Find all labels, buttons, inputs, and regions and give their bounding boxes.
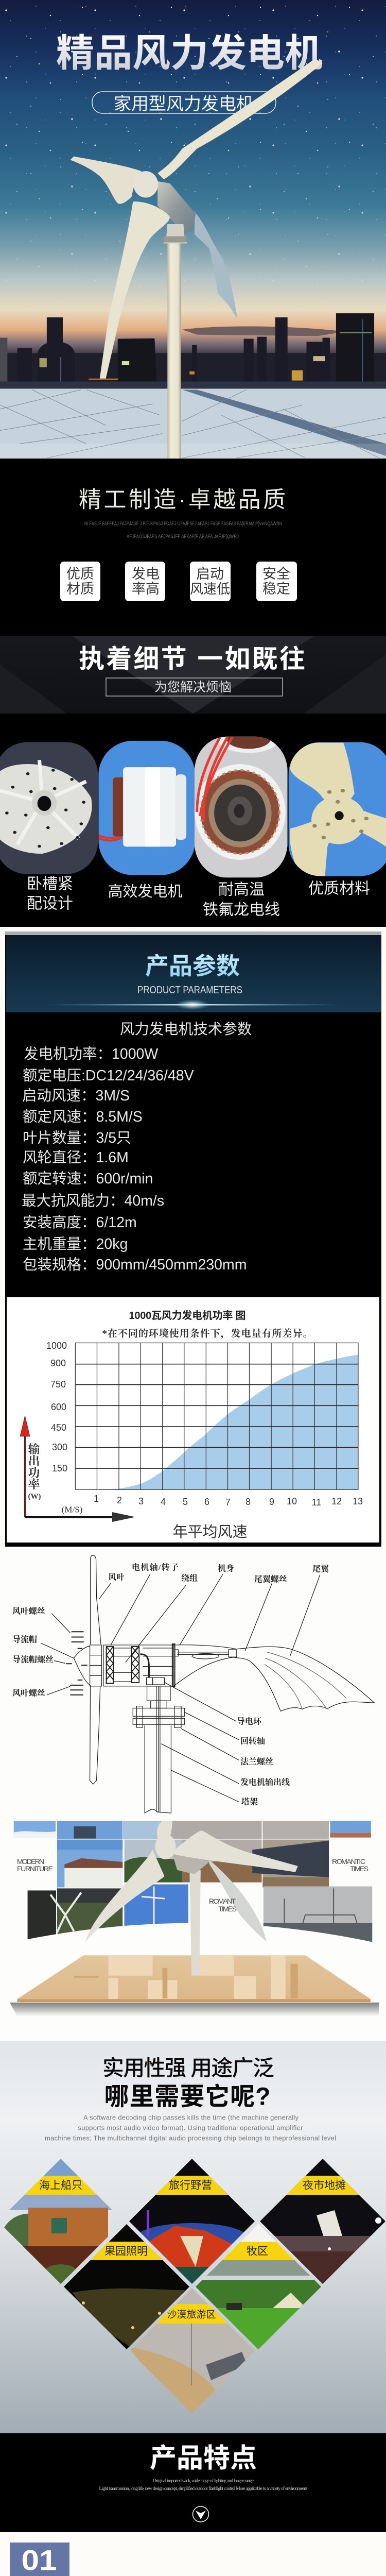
latin filler text [84,521,282,540]
power curve chart: 9 [269,1497,274,1507]
spec table: 包装规格：900mm/450mm230mm [23,1257,247,1273]
panel: usage scenarios [0,2041,386,2433]
latin filler text: AFJPAOSJFAPS AFJPASJFP AFKAP[F AF AFA JAFJP[QWRJ [127,534,239,540]
heading: 哪里需要它呢? [104,2083,271,2110]
banner: product features [0,2433,386,2532]
power curve chart: 6 [204,1497,209,1507]
spec table: 风轮直径：1.6M [23,1149,129,1166]
feature tag: generation rate: 率高 [132,581,160,597]
feature tag: low start wind: 启动 [196,566,224,582]
latin filler text: NI FASJF FAPFPAJ FAJPJASF J P[FJKPASJ FOAFJ OFAJPSFJ AFAPJ FASP FASFAS FA[KRAM P[VHNQAWRN [84,521,282,527]
subtitle pill [92,92,276,114]
banner: attention to detail [0,636,386,714]
spec table: 主机重量：20kg [23,1236,128,1252]
photo: generator housing [98,741,195,875]
blades and nose cap [74,1555,102,1784]
power curve chart: 输 [28,1443,40,1456]
collage captions: TIMES [350,1865,369,1873]
power curve chart: 600 [51,1402,66,1412]
diamond: night market [260,2159,385,2284]
power curve chart: 300 [52,1442,67,1452]
diamond: sea vessels: 海上船只 [39,2179,82,2192]
part labels: 发电机输出线 [240,1777,290,1787]
leader lines [41,1574,320,1802]
parameters header: PRODUCT PARAMETERS [137,985,242,996]
part labels: 风叶 [108,1572,125,1582]
feature tag: safe and stable: 安全 [262,566,290,582]
photo: nylon blade hub [289,742,386,876]
caption: teflon wire: 耐高温 [218,881,265,899]
power curve chart: 150 [52,1463,67,1473]
spec table: 叶片数量：3/5只 [23,1130,131,1146]
power curve chart: 12 [331,1496,342,1506]
panel: component details [0,714,386,927]
panel: craftsmanship quality [0,459,386,636]
heading: 执着细节 一如既往 [79,645,305,673]
power curve chart: 功 [28,1466,40,1480]
part labels: 回转轴 [240,1736,265,1745]
part labels: 绕组 [181,1573,198,1583]
part labels: 风叶螺丝 [12,1688,45,1698]
subheading box [106,678,283,696]
power curve chart: 450 [51,1422,66,1433]
power curve chart [7,1297,379,1543]
diamond: camping: 旅行野营 [169,2179,212,2192]
power curve chart: 1 [94,1494,99,1504]
badge 01: 01 [22,2544,57,2576]
power curve chart: (W) [28,1493,41,1501]
power curve chart: 750 [50,1379,66,1389]
caption: teflon wire: 铁氟龙电线 [203,902,280,918]
heading: 产品特点 [150,2444,257,2473]
power curve chart: *在不同的环境使用条件下，发电量有所差异。 [102,1327,313,1340]
power curve chart: 1000 [46,1341,67,1351]
turbine [85,1821,298,1976]
sub text: Light transmission, long life, new design concept, simplified outdoor flashlight control More applicable to a variety of environments [99,2486,308,2492]
part labels: 导电环 [237,1717,262,1726]
heading: 实用性强 用途广泛 [102,2056,274,2080]
spec table: 安装高度：6/12m [23,1214,137,1231]
caption: slotted fit: 配设计 [27,895,73,912]
part labels [12,1562,330,1806]
english text block: supports most audio video format). Using traditional operational amplifier [78,2124,303,2132]
power curve chart: 10 [287,1496,297,1506]
feature tag: quality material [60,562,100,601]
spec table: 额定电压:DC12/24/36/48V [23,1067,194,1084]
feature tag: generation rate [125,562,165,601]
wind turbine [70,59,323,459]
part labels: 法兰螺丝 [240,1757,273,1766]
collage captions: MODERN [17,1857,44,1866]
english text block: machine times; The multichannel digital audio processing chip belongs to theprofessional level [45,2134,336,2142]
feature tag: low start wind [190,562,231,601]
parameters header [6,935,381,1012]
screws [66,1632,87,1695]
collage captions: FURNITURE [17,1865,53,1873]
diamond: pasture: 牧区 [247,2245,268,2258]
sub text: Original imported wick, wide range of lighting and longer range [153,2478,254,2484]
power curve chart: 8 [245,1497,251,1507]
feature tag: quality material: 优质 [66,566,94,582]
power curve chart: 13 [353,1496,363,1506]
caption: slotted fit [27,876,73,912]
diamond: camping [129,2159,255,2284]
diamond: orchard lighting: 果园照明 [104,2245,148,2258]
collage captions: ROMANTIC [332,1857,365,1866]
sub text [99,2478,308,2492]
feature tag: generation rate: 发电 [132,566,160,582]
heading [102,2056,274,2110]
spec table: 发电机功率：1000W [24,1046,158,1062]
spec table: 最大抗风能力：40m/s [22,1193,164,1209]
heading: 精工制造·卓越品质 [79,487,286,512]
power curve chart: (M/S) [62,1504,82,1515]
diamond: pasture [196,2224,321,2349]
title: 精品风力发电机 [56,32,323,74]
photo: slotted flange disc [0,742,98,874]
power curve chart: 3 [138,1496,144,1506]
part labels: 尾翼螺丝 [254,1574,287,1584]
parameters header: 产品参数 [145,953,240,979]
skyline and terrace floor [0,313,386,459]
part labels: 塔架 [241,1797,258,1806]
panel: product parameters [5,931,381,1547]
part labels: 尾翼 [312,1564,330,1573]
subheading box: 为您解决烦恼 [154,680,232,694]
feature tag: low start wind: 风速低 [190,581,230,597]
diamond: orchard lighting [64,2224,189,2349]
power curve chart: 7 [225,1497,231,1507]
diagram: turbine exploded structure [12,1555,375,1814]
collage captions: ROMANT [209,1897,236,1905]
diamond: night market: 夜市地摊 [303,2179,346,2192]
power curve chart: 4 [161,1497,166,1507]
arrow: output power axis [20,1416,30,1517]
arrow: wind speed axis [25,1512,135,1522]
power curve chart: 1000瓦风力发电机功率 图 [129,1310,246,1321]
collage tiles [14,1821,372,1943]
badge 01 [10,2543,69,2576]
spec table: 额定风速：8.5M/S [23,1109,143,1125]
icon: down chevron [192,2506,209,2522]
feature tag: safe and stable [256,562,297,601]
power curve chart: 900 [50,1358,66,1368]
spec table: 启动风速：3M/S [22,1088,130,1104]
caption: efficient generator: 高效发电机 [108,883,183,900]
spec table: 风力发电机技术参数 [120,1021,252,1038]
feature tag: safe and stable: 稳定 [262,581,290,597]
power curve chart: 出 [28,1455,40,1467]
part labels: 导流帽螺丝 [12,1655,54,1664]
power curve chart: 11 [312,1497,321,1507]
power curve chart: 5 [183,1497,188,1507]
diamond: sea vessels [4,2159,112,2284]
power curve chart: 率 [28,1478,40,1491]
subtitle pill: 家用型风力发电机 [114,94,254,114]
collage captions: TIMES [218,1905,237,1913]
caption: quality materials: 优质材料 [308,880,370,897]
spec table [22,1021,252,1273]
spec table: 额定转速：600r/min [23,1171,153,1187]
hero: night sky with wind turbine [0,0,386,459]
panel: application photo collage with turbine on wood floor [10,1821,379,2015]
feature tag: quality material: 材质 [66,581,94,597]
wood floor [10,1955,379,2016]
feature 01: generator [10,2543,69,2576]
part labels: 电机轴/转子 [132,1562,179,1572]
power curve chart: 年平均风速 [172,1523,248,1540]
english text block: A software decoding chip passes kills the time (the machine generally [83,2113,299,2122]
tower and flange [133,1686,185,1813]
photo: stator with teflon wires [195,724,288,877]
part labels: 风叶螺丝 [12,1606,45,1616]
part labels: 机身 [218,1563,234,1573]
caption: teflon wire [203,881,280,918]
diamond: desert tourism [129,2288,255,2414]
power curve chart: 2 [117,1495,122,1505]
part labels: 导流帽 [12,1634,37,1645]
english text block [45,2113,336,2142]
tail fin [173,1645,374,1711]
generator body [103,1644,175,1687]
caption: slotted fit: 卧槽紧 [27,876,73,892]
diamond: desert tourism: 沙漠旅游区 [167,2309,216,2320]
collage captions [17,1857,369,1913]
